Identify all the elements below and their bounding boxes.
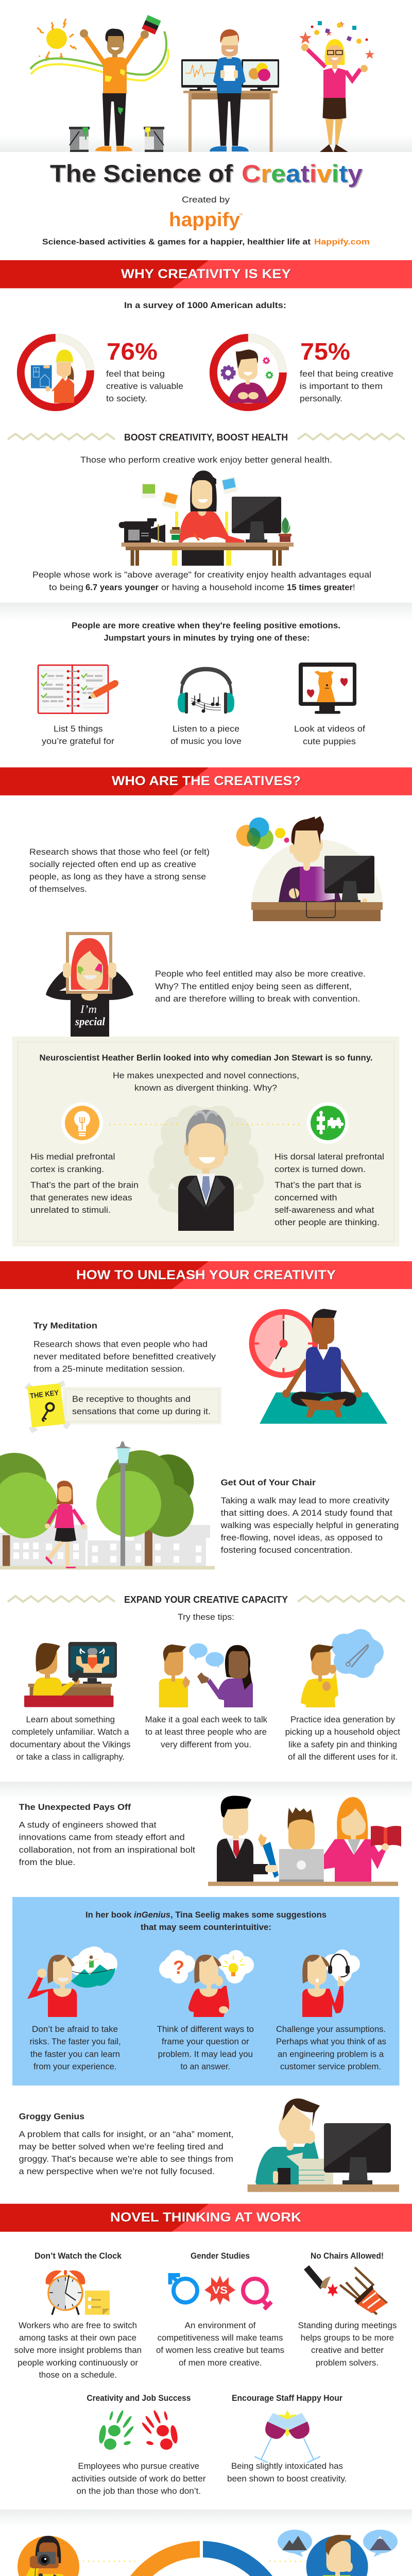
tip text: Being slightly intoxicated has (231, 2462, 343, 2471)
stat figure 76: 76% (107, 338, 158, 365)
tip text: An environment of (185, 2321, 256, 2330)
unexpected pays off text: The Unexpected Pays Off (19, 1803, 131, 1812)
illustration: watching Vikings documentary (24, 1642, 117, 1707)
paint buckets (69, 127, 164, 152)
health advantages text: 6.7 years younger (85, 583, 159, 592)
stat text 76 (106, 369, 183, 403)
panel heading (85, 1910, 327, 1932)
figure: challenge assumptions (302, 1950, 360, 2017)
callout text: Be receptive to thoughts and (72, 1395, 191, 1404)
sticky note with key: THE KEY (29, 1388, 59, 1400)
health advantages text: 15 times greater (287, 583, 353, 592)
health advantages text: or having a household income (161, 583, 284, 592)
tip text: those on a schedule. (39, 2370, 117, 2380)
stat text 75: feel that being creative (300, 369, 393, 379)
tip text: of women less creative but teams (156, 2346, 284, 2355)
tip captions: completely unfamiliar. Watch a (12, 1727, 129, 1737)
medial prefrontal text: unrelated to stimuli. (30, 1206, 111, 1215)
painter figure (80, 15, 161, 151)
social rejection text: socially rejected often end up as creative (29, 860, 196, 869)
band: positive emotions (0, 603, 412, 621)
created by happify logo: Created by (182, 195, 230, 205)
dorsal lateral prefrontal text: concerned with (274, 1193, 337, 1202)
icon: painted hand prints (98, 2410, 179, 2450)
panel heading: Neuroscientist Heather Berlin looked into why comedian Jon Stewart is so funny. (39, 1053, 373, 1062)
unexpected pays off text: innovations came from steady effort and (19, 1833, 185, 1842)
donut chart 76 (21, 338, 90, 407)
positive emotions heading: People are more creative when they're feeling positive emotions. (72, 621, 340, 631)
activity captions: Listen to a piece (173, 724, 239, 734)
icon: light bulb (61, 1102, 103, 1144)
title: The Science of (50, 160, 233, 187)
social rejection text (29, 848, 210, 894)
tip captions: Learn about something (26, 1715, 115, 1724)
tip text: activities outside of work do better (72, 2474, 206, 2483)
tip text: competitiveness will make teams (158, 2333, 283, 2343)
figure captions (30, 2025, 386, 2071)
positive emotions heading (72, 621, 340, 643)
tip text: helps groups to be more (301, 2333, 394, 2343)
tip text: on the job than those who don’t. (76, 2487, 201, 2496)
tip: encourage staff happy hour (227, 2394, 347, 2483)
tagline: Happify.com (314, 238, 370, 246)
groggy genius text: Groggy Genius (19, 2112, 84, 2121)
band: unexpected pays off (0, 1782, 412, 1799)
figure captions: problem. It may lead you (158, 2049, 253, 2059)
illustration: groggy man at monitor (248, 2098, 399, 2192)
tip text: been shown to boost creativity. (227, 2474, 347, 2483)
icon: kicking a chair (306, 2267, 387, 2314)
created by happify logo (169, 195, 243, 231)
dorsal lateral prefrontal text: other people are thinking. (274, 1218, 380, 1227)
gears (221, 358, 273, 380)
entitlement text (155, 970, 366, 1004)
illustration: Jon Stewart (178, 1110, 234, 1231)
groggy genius text (19, 2112, 234, 2176)
meditation text: never meditated before benefitted creatively (33, 1352, 216, 1362)
tip heading: Encourage Staff Happy Hour (232, 2394, 343, 2403)
illustration: meditating man with clock (249, 1309, 387, 1424)
get out of your chair text: Get Out of Your Chair (221, 1478, 316, 1487)
icon: sun (37, 19, 76, 61)
section banner: who are the creatives (0, 768, 412, 795)
tip captions: Practice idea generation by (290, 1715, 396, 1724)
panel: inGenius suggestions (12, 1897, 400, 2086)
computer monitor (232, 497, 281, 543)
activity captions: List 5 things (54, 724, 103, 734)
icon: male vs female (168, 2273, 271, 2309)
heading: expand your creative capacity: EXPAND YOUR CREATIVE CAPACITY (124, 1595, 288, 1605)
social rejection text: of themselves. (29, 885, 87, 894)
figure captions: Challenge your assumptions. (276, 2025, 386, 2034)
health intro text: Those who perform creative work enjoy better general health. (80, 455, 332, 465)
figure captions: customer service problem. (280, 2062, 381, 2071)
tip text (72, 2462, 206, 2496)
tip heading: Creativity and Job Success (87, 2394, 191, 2403)
positive emotions heading: Jumpstart yours in minutes by trying one of these: (104, 634, 310, 643)
stat text 76: to society. (106, 394, 147, 403)
unexpected pays off text (19, 1803, 195, 1867)
icon: clinking wine glasses (252, 2410, 323, 2464)
figure: take risks (27, 1946, 117, 2017)
entitlement text: and are therefore willing to break with convention. (155, 994, 360, 1004)
coffee cup (170, 527, 181, 543)
hero illustration: three creative people (0, 15, 412, 152)
trees (0, 1450, 194, 1566)
illustration: woman with frame I'm special: I’m (80, 1003, 97, 1015)
icon: man with gears (221, 349, 273, 403)
icon: paint brush (142, 15, 161, 35)
social rejection text: people, as long as they have a strong sense (29, 872, 206, 882)
donut chart 75 (213, 338, 283, 407)
tip captions: or take a class in calligraphy. (16, 1753, 125, 1762)
activity captions (42, 724, 365, 746)
get out of your chair text (220, 1478, 399, 1555)
tip captions: to at least three people who are (145, 1727, 267, 1737)
medial prefrontal text: That’s the part of the brain (30, 1181, 139, 1190)
figure captions: the faster you can learn (30, 2049, 120, 2059)
callout: the key (24, 1380, 221, 1433)
stat text 75 (300, 369, 393, 403)
dorsal lateral prefrontal text (274, 1153, 384, 1227)
tip heading: Don’t Watch the Clock (35, 2251, 122, 2261)
desk with monitors (181, 59, 279, 152)
get out of your chair text: free-flowing, novel ideas, as opposed to (221, 1533, 383, 1543)
tip captions: very different from you. (161, 1740, 251, 1749)
get out of your chair text: walking was especially helpful in generating (220, 1521, 399, 1530)
sticky note with key (24, 1380, 71, 1433)
entitlement text: Why? The entitled enjoy being seen as different, (155, 982, 352, 991)
tips intro: Try these tips: (178, 1613, 234, 1622)
paint swooshes (30, 31, 166, 75)
meditation text: Try Meditation (33, 1321, 97, 1330)
tip text: Employees who pursue creative (78, 2462, 199, 2471)
tip text: creative and better (311, 2346, 384, 2355)
figure captions: risks. The faster you fail, (30, 2037, 121, 2046)
heading: expand your creative capacity (8, 1595, 405, 1605)
get out of your chair text: that sitting does. A 2014 study found that (221, 1509, 392, 1518)
illustration: three colleagues (208, 1796, 401, 1886)
get out of your chair text: Taking a walk may lead to more creativity (221, 1496, 390, 1505)
tip captions: of all the different uses for it. (288, 1753, 398, 1762)
panel heading: In her book inGenius, Tina Seelig makes some suggestions (85, 1910, 327, 1920)
dorsal lateral prefrontal text: self-awareness and what (274, 1206, 374, 1215)
figure captions: to an answer. (180, 2062, 230, 2071)
tip heading: Gender Studies (191, 2251, 250, 2261)
panel intro: known as divergent thinking. Why? (134, 1083, 277, 1093)
tip text: Standing during meetings (298, 2321, 397, 2330)
callout text (72, 1395, 211, 1416)
woman with confetti (299, 21, 374, 152)
figure captions: Don’t be afraid to take (32, 2025, 118, 2034)
tip text (227, 2462, 347, 2483)
created by happify logo: happify (169, 209, 240, 231)
illustration: photographer (18, 2536, 79, 2576)
clock (249, 1309, 318, 1378)
tip text: of men more creative. (179, 2359, 262, 2368)
tip: no chairs allowed (298, 2251, 397, 2368)
tip captions (10, 1715, 400, 1762)
heading: boost creativity, boost health (8, 432, 405, 443)
stat 76 percent (21, 338, 183, 407)
band: managers handbook (0, 2510, 412, 2527)
panel: Jon Stewart brain study (12, 1037, 400, 1247)
icon: puzzle pieces (307, 1102, 349, 1144)
icon: monitor with puppy (299, 663, 356, 714)
icon: gratitude notebook (38, 665, 118, 714)
tip text (298, 2321, 397, 2368)
survey intro: In a survey of 1000 American adults: (124, 301, 286, 310)
illustration: woman with frame I'm special: special (75, 1015, 106, 1028)
unexpected pays off text: from the blue. (19, 1858, 75, 1867)
icon: alarm clock and checklist (46, 2270, 110, 2315)
tip text: Workers who are free to switch (19, 2321, 137, 2330)
illustration: man thinking of mountains (278, 2530, 398, 2576)
illustration: woman at desk (119, 470, 294, 566)
confetti (299, 21, 374, 59)
illustration: thinking about a safety pin (301, 1629, 384, 1707)
activity captions: of music you love (170, 737, 242, 746)
section banner: how to unleash your creativity: HOW TO UNLEASH YOUR CREATIVITY (76, 1268, 336, 1282)
street lamp (115, 1442, 132, 1566)
city buildings (0, 1517, 210, 1566)
activity captions: cute puppies (303, 737, 356, 746)
title: Creativity (243, 161, 364, 188)
panel intro: He makes unexpected and novel connections, (113, 1071, 299, 1080)
section banner: why creativity is key (0, 260, 412, 289)
icon: male vs female: VS (212, 2285, 228, 2296)
unexpected pays off text: collaboration, not from an inspirational bolt (19, 1845, 195, 1855)
social rejection text: Research shows that those who feel (or felt) (29, 848, 210, 857)
thought bubbles: mountains (278, 2530, 398, 2557)
tip text: among tasks at their own pace (19, 2333, 136, 2343)
groggy genius text: A problem that calls for insight, or an “aha” moment, (19, 2130, 234, 2139)
meditation text (33, 1321, 216, 1374)
groggy genius text: groggy. That's because we're able to see things from (19, 2155, 233, 2164)
get out of your chair text: fostering focused concentration. (221, 1546, 353, 1555)
groggy genius text: a new perspective when we're not fully focused. (19, 2167, 215, 2176)
brain graphic (148, 1106, 264, 1219)
figure: frame your question: ? (173, 1957, 184, 1978)
meditation text: from a 25-minute meditation session. (33, 1365, 185, 1374)
groggy genius text: may be better solved when we're feeling tired and (19, 2142, 224, 2151)
dotted connectors (50, 2562, 340, 2576)
stat text 76: creative is valuable (106, 382, 183, 391)
created by happify logo: TM (239, 213, 243, 216)
tip text: people working continuously or (18, 2359, 139, 2368)
camera (119, 518, 165, 543)
walking woman (45, 1481, 87, 1568)
illustration: man at monitor with idea bubbles (236, 816, 383, 921)
tip text (14, 2321, 142, 2380)
figure captions: Perhaps what you think of as (276, 2037, 386, 2046)
figure captions: from your experience. (33, 2062, 116, 2071)
tip text: problem solvers. (316, 2359, 379, 2368)
activity captions: you’re grateful for (42, 737, 115, 746)
dotted connectors (109, 1124, 300, 1125)
chart: managers' handbook ring (112, 2541, 291, 2576)
entitlement text: People who feel entitled may also be more creative. (155, 970, 366, 979)
dorsal lateral prefrontal text: cortex is turned down. (274, 1165, 366, 1174)
section banner: why creativity is key: WHY CREATIVITY IS KEY (121, 267, 291, 281)
tagline: Science-based activities & games for a happier, healthier life at (42, 238, 311, 246)
medial prefrontal text (30, 1153, 139, 1215)
panel heading: that may seem counterintuitive: (141, 1923, 271, 1932)
tip captions: Make it a goal each week to talk (145, 1715, 268, 1724)
man with tablet (210, 29, 249, 151)
health advantages text (32, 570, 371, 592)
section banner: novel thinking at work (0, 2204, 412, 2232)
medial prefrontal text: that generates new ideas (30, 1193, 132, 1202)
tip text (156, 2321, 284, 2368)
activity captions: Look at videos of (294, 724, 365, 734)
title: The Science of (51, 161, 234, 188)
tip: creativity and job success (72, 2394, 206, 2496)
figure captions: frame your question or (162, 2037, 249, 2046)
tip captions: like a safety pin and thinking (288, 1740, 397, 1749)
tip heading: No Chairs Allowed! (311, 2251, 384, 2261)
title: Creativity (242, 160, 363, 187)
section banner: novel thinking at work: NOVEL THINKING AT WORK (110, 2210, 301, 2225)
heading: boost creativity, boost health: BOOST CREATIVITY, BOOST HEALTH (124, 432, 288, 443)
illustration: woman with frame I'm special (46, 934, 133, 1037)
callout text: sensations that come up during it. (72, 1407, 211, 1416)
figure captions: Think of different ways to (157, 2025, 254, 2034)
illustration: talking to different people (159, 1643, 253, 1707)
tip captions: documentary about the Vikings (10, 1740, 131, 1749)
tip text: solve more insight problems than (14, 2346, 142, 2355)
section banner: how to unleash your creativity (0, 1261, 412, 1289)
icon: architect (31, 349, 74, 403)
figure captions: an engineering problem is a (278, 2049, 384, 2059)
tip: gender studies (156, 2251, 284, 2368)
stat text 75: personally. (300, 394, 342, 403)
health advantages text: People whose work is "above average" for creativity enjoy health advantages equal (32, 570, 371, 580)
tip captions: picking up a household object (285, 1727, 400, 1737)
unexpected pays off text: A study of engineers showed that (19, 1821, 157, 1830)
title (50, 160, 364, 188)
illustration: woman walking in the park (0, 1442, 215, 1569)
section banner: who are the creatives: WHO ARE THE CREATIVES? (112, 774, 301, 788)
meditation text: Research shows that even people who had (33, 1340, 208, 1349)
medial prefrontal text: His medial prefrontal (30, 1153, 115, 1162)
potted plant (279, 517, 291, 542)
icon: headphones with music (178, 668, 234, 714)
health advantages text: ! (353, 583, 355, 592)
figure: frame your question (159, 1950, 254, 2017)
stat figure 75: 75% (300, 338, 350, 365)
stat text 75: is important to them (300, 382, 383, 391)
dorsal lateral prefrontal text: His dorsal lateral prefrontal (274, 1153, 384, 1162)
medial prefrontal text: cortex is cranking. (30, 1165, 104, 1174)
health advantages text: to being (49, 583, 83, 592)
stat 75 percent (213, 338, 393, 407)
tip: don't watch the clock (14, 2251, 142, 2380)
dorsal lateral prefrontal text: That’s the part that is (274, 1181, 362, 1190)
stat text 76: feel that being (106, 369, 165, 379)
panel intro (113, 1071, 299, 1093)
